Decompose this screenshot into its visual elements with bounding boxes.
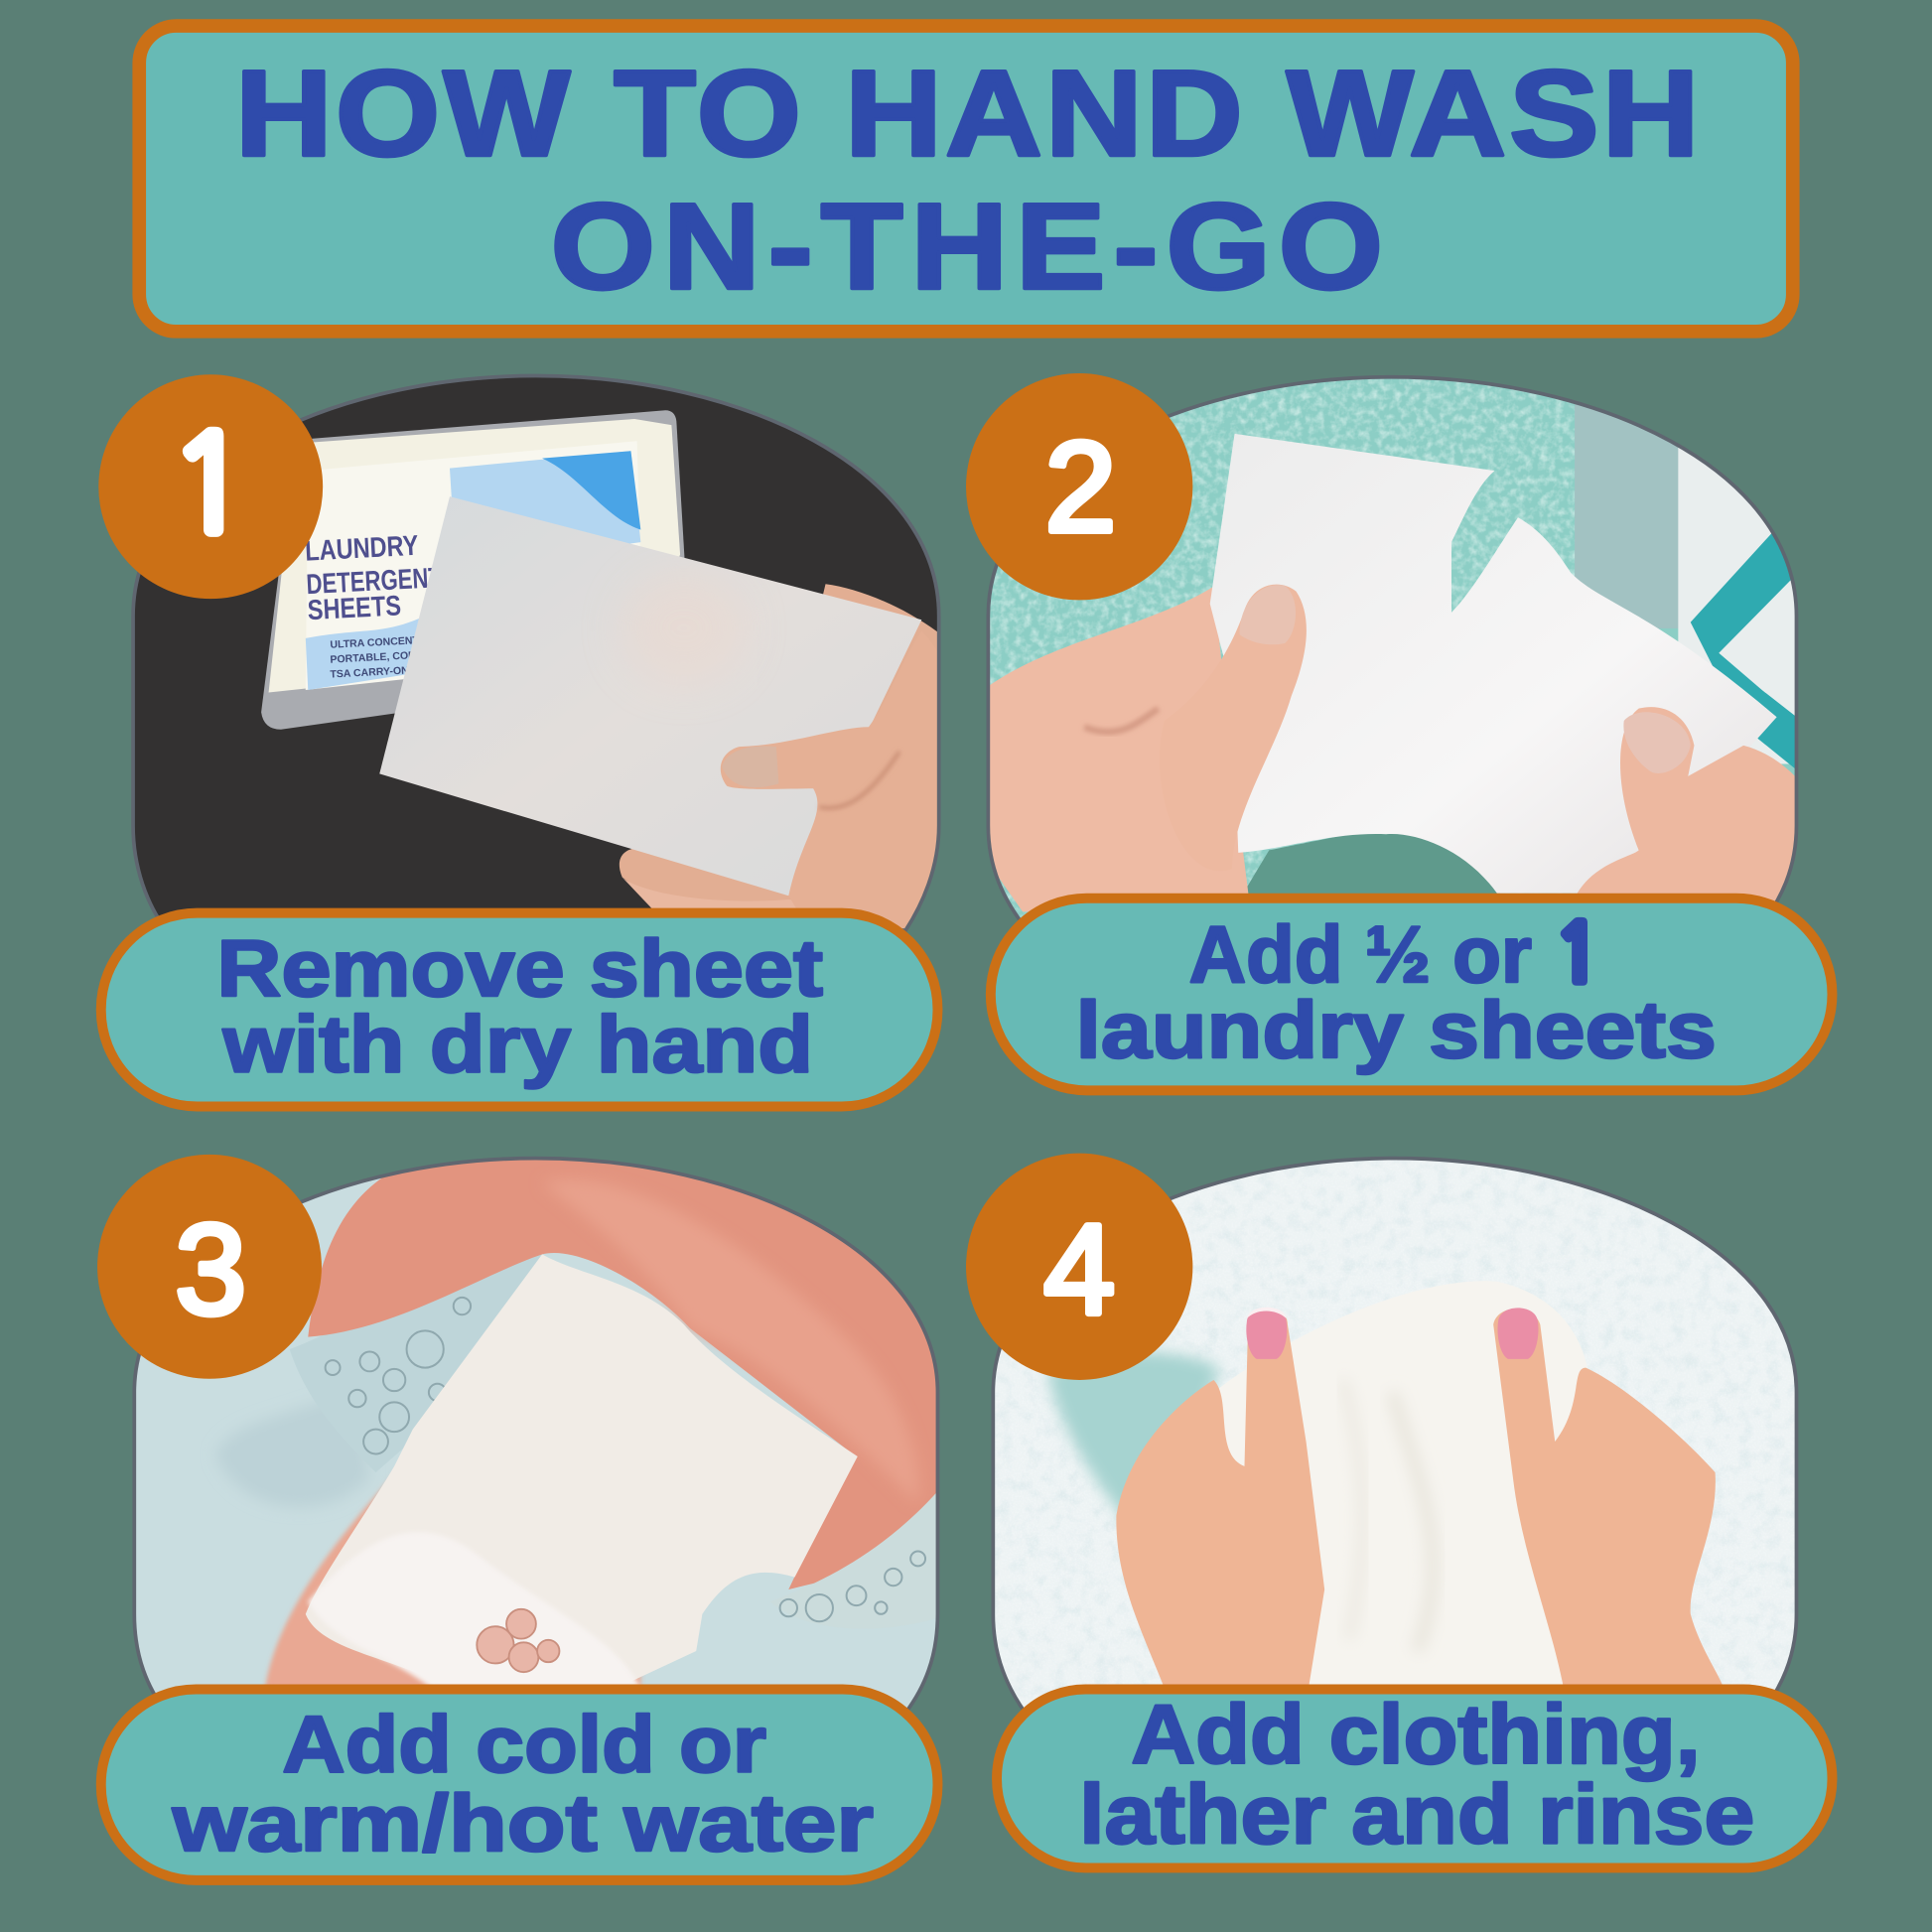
left hand — [980, 587, 1251, 911]
white laundry sheet — [379, 496, 921, 896]
box label text: DETERGENT — [306, 562, 443, 601]
box bullet text: PORTABLE, COMPACT — [330, 648, 446, 666]
number badge 4: 4 — [1043, 1198, 1115, 1341]
lower palm — [263, 1481, 643, 1684]
foam right — [814, 1493, 936, 1584]
right thumbnail — [1497, 1308, 1539, 1359]
left thumb — [1221, 584, 1307, 832]
caption pill 2: laundry sheets — [1075, 986, 1717, 1075]
white sheet — [1210, 434, 1777, 894]
photo frame — [134, 1159, 937, 1713]
number badge 1 — [98, 374, 323, 599]
caption pill 1: with dry hand — [222, 1001, 813, 1090]
photo: tearing a sheet above a towel — [980, 369, 1805, 936]
lower dark towel — [1247, 834, 1500, 894]
caption pill 4 — [997, 1688, 1832, 1867]
dissolving white sheet — [306, 1254, 858, 1686]
number badge 2: 2 — [1045, 416, 1116, 559]
heading line 1: HOW TO HAND WASH — [235, 46, 1699, 182]
pink bubbles — [477, 1609, 559, 1672]
right hand — [1577, 707, 1795, 901]
caption pill 1 — [101, 913, 937, 1106]
caption pill 4: lather and rinse — [1079, 1768, 1754, 1862]
number badge 3: 3 — [175, 1198, 246, 1341]
photo frame — [993, 1159, 1796, 1713]
box label text: LAUNDRY — [304, 530, 419, 568]
photo frame — [133, 376, 939, 930]
caption pill 3: warm/hot water — [172, 1779, 874, 1868]
caption pill 3: Add cold or — [282, 1701, 766, 1790]
box bullet text: ULTRA CONCENTRATED — [330, 632, 455, 651]
teal foam shadow — [1047, 1352, 1220, 1540]
box bullet text: TSA CARRY-ON COMP — [330, 663, 444, 681]
caption pill 4: Add clothing, — [1131, 1688, 1701, 1781]
caption pill 2 — [991, 898, 1832, 1090]
right hand — [1493, 1309, 1725, 1694]
panel: step 3 — [97, 1152, 949, 1880]
panel: step 2 — [966, 369, 1832, 1090]
box label text — [306, 535, 432, 620]
photo: sheet dissolving in water on palm — [123, 1152, 949, 1725]
number badge 3 — [97, 1155, 322, 1379]
number badge 1: 1 — [169, 418, 250, 551]
bubbles — [326, 1298, 471, 1453]
hand behind sheet — [620, 584, 937, 901]
white cloth — [1213, 1281, 1589, 1701]
panel: step 1 — [98, 369, 949, 1106]
caption pill 3 — [101, 1690, 937, 1880]
caption pill 2: Add ½ or 1 — [1189, 910, 1601, 1000]
heading line 2: ON-THE-GO — [551, 179, 1383, 315]
left hand — [1116, 1308, 1324, 1688]
box bullet text — [330, 636, 415, 677]
box label text: SHEETS — [307, 590, 402, 626]
teal rack — [1690, 534, 1795, 768]
number badge 2 — [966, 373, 1192, 600]
caption pill 1: Remove sheet — [216, 924, 823, 1014]
foam left — [290, 1254, 542, 1472]
photo: laundry sheet box and hand — [123, 369, 949, 949]
panel: step 4 — [966, 1152, 1832, 1867]
photo frame — [988, 377, 1796, 924]
number badge 4 — [966, 1154, 1192, 1380]
photo: hands lathering cloth in foam — [986, 1152, 1805, 1725]
title banner — [139, 26, 1793, 332]
left thumbnail — [1246, 1308, 1287, 1359]
upper hand — [308, 1152, 949, 1589]
thumb — [721, 721, 937, 928]
